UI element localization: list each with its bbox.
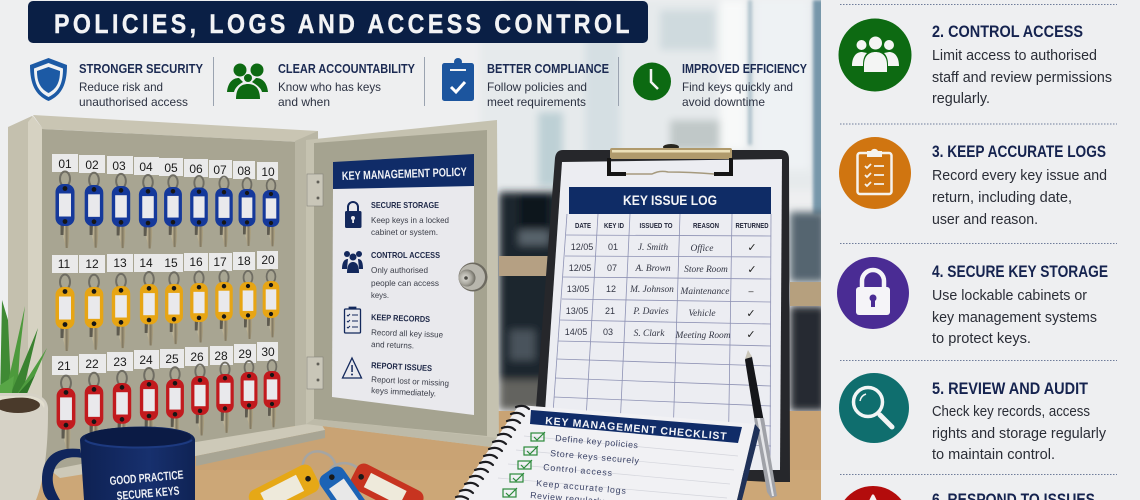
icon: clipboard checklist: [839, 137, 911, 209]
key number labels: row 3: 21: [57, 359, 71, 373]
benefit: clear accountability: Know who has keys: [278, 80, 381, 94]
policy: control access: keys.: [371, 291, 389, 300]
pen: [745, 350, 777, 498]
checklist items: Keep accurate logs: [536, 478, 627, 496]
benefit: improved efficiency: Find keys quickly and: [682, 80, 793, 94]
issue log table: ✓: [746, 308, 756, 320]
issue log table: 07: [607, 263, 617, 273]
step 2: control access: staff and review permissions: [932, 70, 1112, 86]
issue log table: A. Brown: [634, 264, 671, 274]
icon: people group: [227, 64, 268, 99]
key number labels: row 1: 02: [85, 158, 99, 172]
icon: warning triangle: [342, 358, 362, 378]
key number labels: row 2: [52, 251, 278, 273]
key number labels: row 1: 07: [213, 163, 227, 177]
policy: keep records: KEEP RECORDS: [371, 312, 431, 324]
issue log table: [549, 214, 771, 470]
icon: clock: [633, 62, 671, 100]
table header band: KEY ISSUE LOG: [623, 192, 717, 208]
step 4: secure key storage: Use lockable cabinets or: [932, 288, 1087, 304]
issue log table: Meeting Room: [675, 331, 731, 341]
coffee mug: [42, 426, 195, 500]
checklist items: Store keys securely: [550, 448, 640, 466]
yellow tag: [246, 462, 322, 500]
benefit: stronger security: STRONGER SECURITY: [79, 62, 204, 76]
clipboard: key issue log: [535, 144, 790, 482]
step 5: review and audit: Check key records, access: [932, 404, 1090, 420]
step 3: keep accurate logs: return, including date,: [932, 190, 1072, 206]
step 3: keep accurate logs: Record every key issue and: [932, 168, 1107, 184]
yellow key tags: row 2: [56, 270, 279, 351]
key number labels: row 3: [52, 342, 278, 375]
step 5: review and audit: rights and storage regularly: [932, 426, 1107, 442]
policy: secure storage: Keep keys in a locked: [371, 216, 449, 225]
key number labels: row 2: 16: [189, 255, 203, 269]
benefit: clear accountability: [227, 62, 416, 109]
key number labels: row 2: 17: [213, 255, 227, 269]
key number labels: row 2: 20: [261, 253, 275, 267]
benefit: improved efficiency: [633, 62, 808, 109]
policy sheet: KEY MANAGEMENT POLICY: [342, 165, 467, 183]
step 2: control access: [838, 18, 1112, 107]
benefit: stronger security: unauthorised access: [79, 95, 188, 109]
blue key tags: row 1: [56, 172, 279, 248]
issue log table: 12/05: [569, 263, 591, 273]
issue log table: 14/05: [565, 327, 587, 337]
step 2: control access: regularly.: [932, 91, 990, 107]
issue log table: 12/05: [571, 242, 593, 252]
issue log table: 13/05: [566, 306, 588, 316]
issue log table: 21: [605, 306, 615, 316]
step 5: review and audit: [839, 373, 1107, 463]
key number labels: row 1: 03: [112, 159, 126, 173]
icon: people group: [838, 18, 912, 92]
red key tags: row 3: [57, 360, 280, 451]
benefit: improved efficiency: avoid downtime: [682, 95, 765, 109]
key number labels: row 3: 26: [190, 350, 204, 364]
policy: report issues: keys immediately.: [371, 386, 436, 398]
issue log table: ✓: [747, 264, 757, 276]
key number labels: row 2: 12: [85, 257, 99, 271]
policy: control access: people can access: [371, 279, 439, 288]
policy: keep records: [344, 307, 444, 350]
policy: report issues: Report lost or missing: [371, 375, 450, 388]
policy: secure storage: SECURE STORAGE: [371, 200, 439, 210]
key number labels: row 3: 25: [165, 352, 179, 366]
benefit: clear accountability: CLEAR ACCOUNTABILITY: [278, 62, 416, 76]
issue log table: P. Davies: [632, 307, 669, 317]
key number labels: row 3: 30: [261, 345, 275, 359]
key number labels: row 1: 06: [189, 162, 203, 176]
issue log table: Maintenance: [680, 287, 729, 297]
step 2: control access: 2. CONTROL ACCESS: [932, 22, 1083, 41]
key number labels: row 2: 11: [58, 257, 71, 271]
checklist header band: KEY MANAGEMENT CHECKLIST: [545, 415, 728, 443]
step 6: respond to issues: [844, 486, 1095, 500]
issue log table: M. Johnson: [629, 285, 674, 295]
step 5: review and audit: 5. REVIEW AND AUDIT: [932, 379, 1089, 398]
key number labels: row 1: 04: [139, 160, 153, 174]
issue log table: KEY ID: [604, 223, 624, 230]
issue log table: 12: [606, 284, 616, 294]
issue log table: REASON: [693, 223, 719, 230]
benefit: better compliance: BETTER COMPLIANCE: [487, 62, 609, 76]
step 4: secure key storage: key management systems: [932, 310, 1097, 326]
policy: report issues: [342, 358, 450, 398]
icon: padlock: [345, 202, 362, 228]
benefit: improved efficiency: IMPROVED EFFICIENCY: [682, 62, 808, 76]
issue log table: ✓: [746, 329, 756, 341]
key number labels: row 1: 05: [164, 161, 178, 175]
benefit: better compliance: [442, 58, 609, 109]
key number labels: row 1: 10: [261, 165, 275, 179]
blue tag: [316, 463, 379, 500]
key number labels: row 1: 08: [237, 164, 251, 178]
policy sheet: [332, 154, 474, 415]
key number labels: row 3: 29: [238, 347, 252, 361]
red tag: [348, 461, 426, 500]
issue log table: Vehicle: [688, 309, 716, 319]
benefit: better compliance: Follow policies and: [487, 80, 587, 94]
title banner: [28, 1, 648, 43]
key number labels: row 1: 01: [58, 157, 72, 171]
key number labels: row 2: 18: [237, 254, 251, 268]
icon: padlock: [837, 257, 909, 329]
loose key tags on desk: [246, 451, 426, 500]
policy: control access: CONTROL ACCESS: [371, 250, 440, 260]
policy: secure storage: cabinet or system.: [371, 228, 438, 237]
door hinges: [307, 174, 323, 389]
issue log table: RETURNED: [736, 223, 768, 230]
checklist items: [503, 432, 640, 500]
office background: [0, 0, 825, 500]
issue log table: DATE: [575, 223, 591, 230]
step 3: keep accurate logs: user and reason.: [932, 212, 1038, 228]
policy: control access: [342, 250, 440, 300]
issue log table: 01: [608, 242, 618, 252]
key number labels: row 2: 13: [113, 256, 127, 270]
table header band: [569, 187, 771, 214]
panel: good practice steps: [821, 0, 1140, 500]
icon: warning: [844, 486, 902, 500]
step 2: control access: Limit access to authorised: [932, 48, 1097, 64]
policy: control access: Only authorised: [371, 266, 428, 275]
benefit: stronger security: [30, 58, 204, 109]
policy: keep records: and returns.: [371, 340, 414, 350]
key rings: [303, 451, 364, 478]
key number labels: row 2: 14: [139, 256, 153, 270]
step 3: keep accurate logs: [839, 137, 1107, 228]
icon: clipboard with tick: [442, 58, 474, 101]
issue log table: 03: [603, 327, 613, 337]
checklist items: Control access: [543, 462, 613, 478]
title banner: POLICIES, LOGS AND ACCESS CONTROL: [54, 9, 633, 39]
cabinet door: [306, 120, 499, 448]
key cabinet body: [8, 115, 325, 478]
door lock knob: [458, 262, 488, 292]
icon: checklist: [344, 307, 360, 333]
benefit: stronger security: Reduce risk and: [79, 80, 163, 94]
icon: people: [342, 251, 363, 273]
step 4: secure key storage: [837, 257, 1108, 347]
checklist items: Define key policies: [555, 433, 639, 450]
potted plant: [0, 300, 48, 500]
key number labels: row 3: 22: [85, 357, 99, 371]
key number labels: row 3: 24: [139, 353, 153, 367]
notebook: key management checklist: [455, 405, 760, 500]
key number labels: row 1: [52, 154, 278, 180]
issue log table: ✓: [747, 242, 757, 254]
plant pot: [0, 393, 48, 500]
policy: keep records: Record all key issue: [371, 328, 444, 340]
coffee mug: GOOD PRACTICE: [109, 468, 184, 488]
benefit: clear accountability: and when: [278, 95, 330, 109]
key number labels: row 3: 28: [214, 349, 228, 363]
benefit: better compliance: meet requirements: [487, 95, 586, 109]
policy: secure storage: [345, 200, 449, 237]
step 5: review and audit: to maintain control.: [932, 447, 1055, 463]
icon: magnifying glass: [839, 373, 909, 443]
issue log table: J. Smith: [638, 243, 668, 253]
key number labels: row 3: 23: [113, 355, 127, 369]
issue log table: Store Room: [684, 265, 728, 275]
icon: shield: [30, 58, 67, 101]
issue log table: ISSUED TO: [640, 223, 673, 230]
issue log table: Office: [691, 243, 713, 254]
step 4: secure key storage: to protect keys.: [932, 331, 1031, 347]
issue log table: 13/05: [567, 284, 589, 294]
key number labels: row 2: 15: [164, 256, 178, 270]
clipboard clip: [607, 144, 733, 176]
issue log table: –: [748, 286, 754, 296]
policy: report issues: REPORT ISSUES: [371, 360, 433, 373]
issue log table: S. Clark: [634, 329, 665, 339]
spiral binding: [456, 406, 529, 499]
